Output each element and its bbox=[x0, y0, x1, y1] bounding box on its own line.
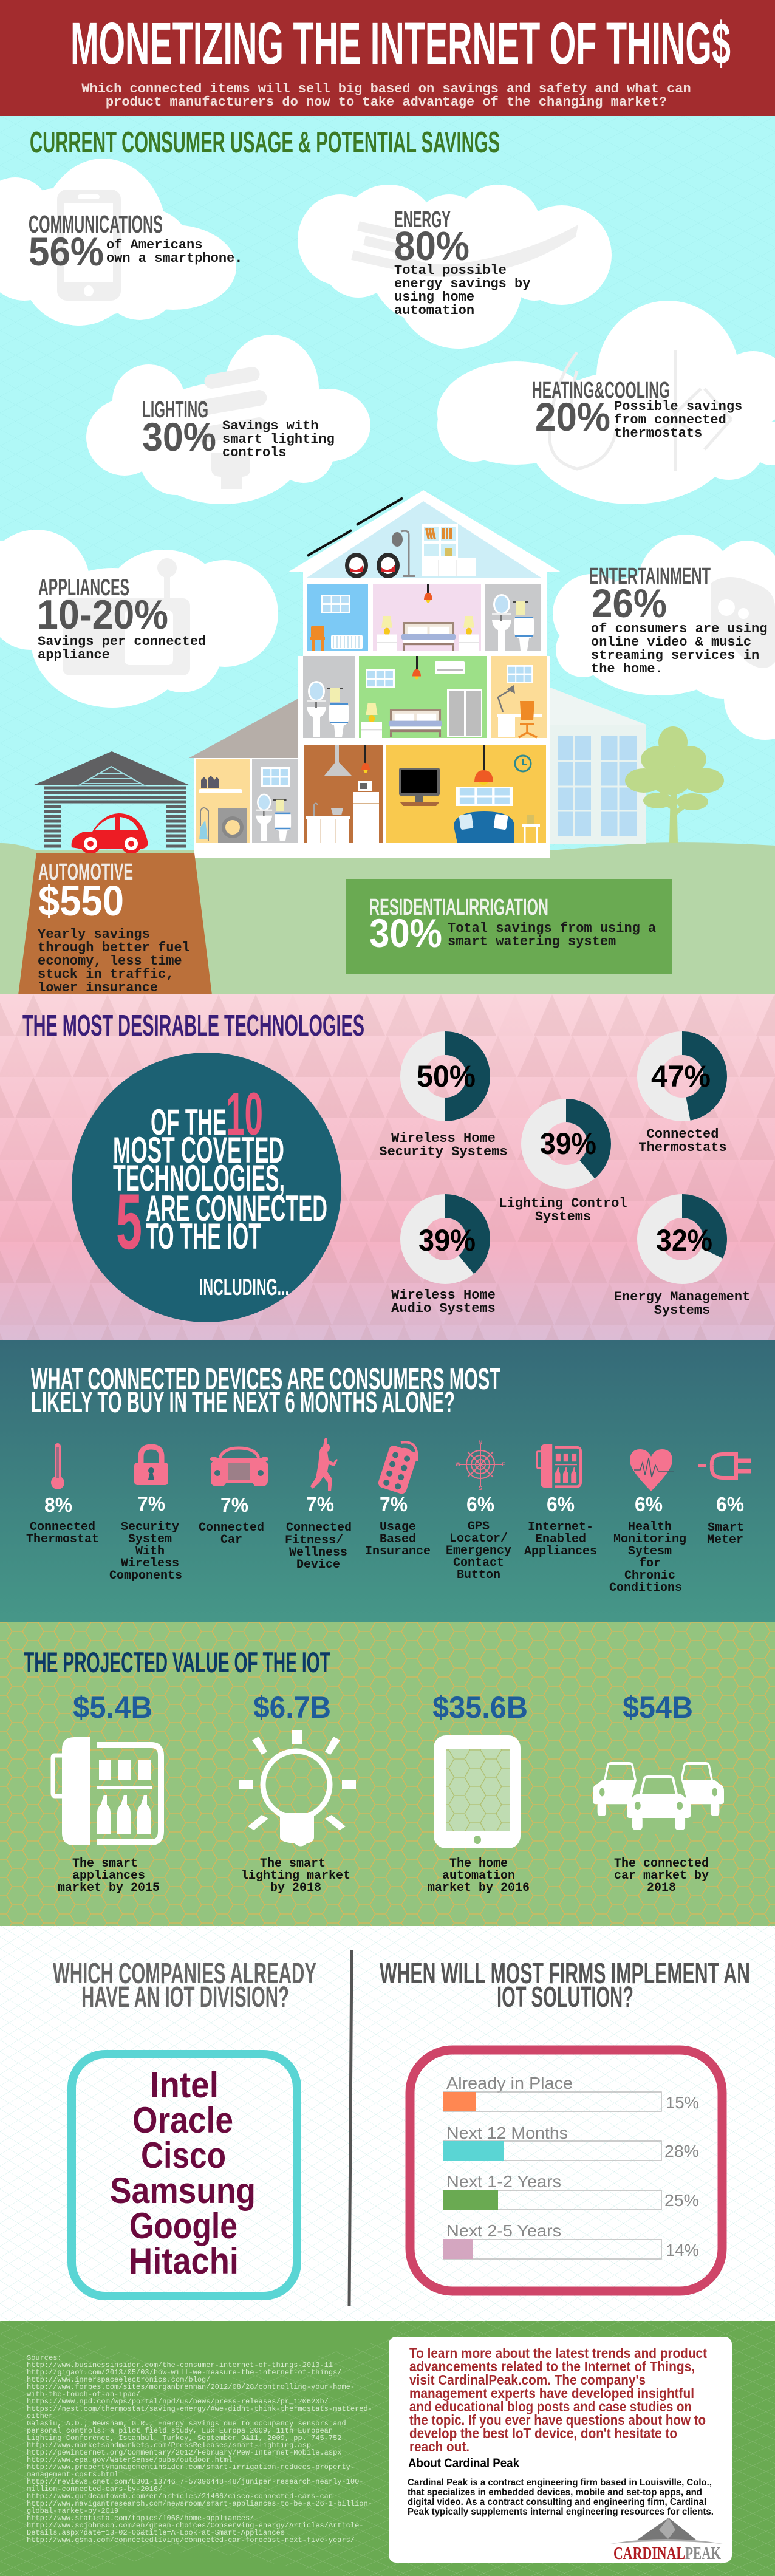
heading: connected devices: LIKELY TO BUY IN THE NEXT 6 MONTHS ALONE? bbox=[31, 1386, 455, 1419]
heading: when will most firms: IOT SOLUTION? bbox=[497, 1981, 633, 2014]
item: internet-enabled appliances: Internet- bbox=[528, 1520, 593, 1534]
call to action text bbox=[409, 2345, 707, 2455]
text block: sources: http://pewinternet.org/Commentary/2012/February/Pew-Internet-Mobile.aspx bbox=[27, 2448, 341, 2457]
description: automotive savings: economy, less time bbox=[38, 954, 182, 969]
description: appliance savings bbox=[38, 634, 206, 663]
text block: sources: with-the-touch-of-an-ipad/ bbox=[27, 2390, 140, 2399]
call to action text: management experts have developed insightful bbox=[409, 2385, 694, 2401]
cloud: communications bbox=[0, 159, 242, 326]
column: smart appliances $5.4B bbox=[53, 1690, 161, 1895]
item: usage based insurance: Based bbox=[380, 1532, 416, 1546]
call to action text: and educational blog posts and case studies on bbox=[409, 2399, 692, 2414]
item: connected thermostat: 8% bbox=[44, 1494, 72, 1516]
donut: wireless home security 50% bbox=[379, 1044, 508, 1160]
donut: energy management 32%: Energy Management bbox=[614, 1290, 750, 1305]
item: GPS locator: Locator/ bbox=[449, 1532, 508, 1546]
item: GPS locator: 6% bbox=[466, 1493, 494, 1515]
hex background bbox=[0, 1622, 775, 1926]
item: security system: System bbox=[128, 1532, 172, 1546]
item: GPS locator: N bbox=[479, 1440, 482, 1446]
text block: sources bbox=[27, 2354, 372, 2544]
description: thermostat savings: Possible savings bbox=[614, 399, 742, 414]
donut: lighting control 39% bbox=[499, 1110, 627, 1225]
about text: Peak typically supplements internal engineering resources for clients. bbox=[408, 2507, 714, 2517]
left wing bbox=[189, 699, 299, 846]
description: streaming: online video & music bbox=[591, 635, 751, 650]
right wing bbox=[550, 688, 646, 844]
pink background bbox=[0, 994, 775, 1340]
description: thermostat savings bbox=[614, 399, 742, 441]
column: smart lighting $6.7B: $6.7B bbox=[253, 1690, 331, 1724]
description: energy savings bbox=[394, 263, 530, 318]
column: home automation $35.6B: market by 2016 bbox=[428, 1881, 530, 1895]
panel: footer bbox=[0, 2321, 775, 2576]
callout: 5 of the 10: INCLUDING... bbox=[199, 1274, 289, 1300]
item: connected car bbox=[199, 1448, 268, 1547]
item: security system: 7% bbox=[137, 1492, 165, 1515]
description: lighting savings: Savings with bbox=[222, 419, 318, 434]
item: connected car: 7% bbox=[220, 1494, 248, 1516]
item: security system: With bbox=[135, 1545, 165, 1559]
donut: connected thermostats 47%: Connected bbox=[647, 1127, 719, 1142]
callout: 5 of the 10: 10 bbox=[226, 1080, 263, 1147]
call to action text: advancements related to the Internet of Things, bbox=[409, 2359, 695, 2374]
icon: smartphone bbox=[57, 190, 121, 301]
bar: next 2-5 years 14%: Next 2-5 Years bbox=[446, 2221, 561, 2240]
text block: sources: http://www.innerspaceelectronics.com/blog/ bbox=[27, 2376, 210, 2384]
column: connected car $54B: 2018 bbox=[647, 1881, 676, 1895]
box: company list: Google bbox=[129, 2205, 237, 2246]
item: health monitoring: Chronic bbox=[624, 1569, 675, 1583]
text block: sources: Lighting Conference, Istanbul, Turkey, September 9&11, 2009, pp. 745-752 bbox=[27, 2434, 341, 2442]
column: connected car $54B: $54B bbox=[623, 1690, 693, 1724]
solar panels bbox=[307, 498, 403, 556]
text block: sources: https://nest.com/thermostat/saving-energy/#we-didnt-think-thermostats-mattered- bbox=[27, 2405, 372, 2413]
bar: next 1-2 years 25%: 25% bbox=[664, 2191, 699, 2210]
donut: wireless home security 50%: Security Systems bbox=[379, 1144, 508, 1160]
column: smart appliances $5.4B: $5.4B bbox=[73, 1690, 152, 1724]
donut: connected thermostats 47% bbox=[638, 1044, 727, 1155]
bar: already in place 15%: Already in Place bbox=[446, 2074, 573, 2093]
text block: sources: http://www.epa.gov/WaterSense/pubs/outdoor.html bbox=[27, 2456, 232, 2464]
donut: lighting control 39%: Systems bbox=[535, 1209, 591, 1225]
label: communications: COMMUNICATIONS bbox=[29, 210, 163, 238]
description: automotive savings: lower insurance bbox=[38, 980, 158, 996]
item: internet-enabled appliances: 6% bbox=[547, 1493, 575, 1515]
box: company list bbox=[72, 2054, 297, 2296]
item: connected thermostat: Connected bbox=[30, 1520, 95, 1534]
illustration: garage with red car bbox=[33, 751, 190, 854]
description: lighting savings bbox=[222, 419, 335, 460]
description: energy savings: using home bbox=[394, 290, 474, 305]
donut: energy management 32%: Systems bbox=[654, 1303, 710, 1318]
description: automotive savings: through better fuel bbox=[38, 940, 190, 955]
description: irrigation savings: Total savings from using a bbox=[448, 921, 656, 936]
text block: sources: global-market-by-2019 bbox=[27, 2507, 118, 2515]
icon: flame and snowflake bbox=[550, 350, 731, 471]
description: thermostat savings: thermostats bbox=[614, 426, 702, 441]
call to action text: develop the best IoT device, don't hesitate to bbox=[409, 2425, 677, 2441]
label: residential irrigation: RESIDENTIALIRRIGATION bbox=[369, 895, 548, 920]
about heading: About Cardinal Peak bbox=[408, 2456, 519, 2470]
item: GPS locator: Contact bbox=[453, 1556, 504, 1570]
item: smart meter: 6% bbox=[716, 1493, 744, 1515]
cloud: entertainment bbox=[553, 535, 775, 740]
item: security system: Components bbox=[109, 1569, 182, 1583]
item: health monitoring: 6% bbox=[635, 1493, 663, 1515]
item: fitness device: Connected bbox=[286, 1521, 352, 1535]
item: fitness device: Device bbox=[296, 1558, 340, 1572]
bar: next 12 months 28%: 28% bbox=[664, 2142, 699, 2161]
top floor rooms bbox=[307, 584, 541, 651]
panel: current consumer usage and potential savings bbox=[0, 116, 775, 996]
description: appliance savings: appliance bbox=[38, 647, 110, 663]
column: connected car $54B: The connected bbox=[614, 1857, 709, 1871]
item: smart meter: Smart bbox=[708, 1521, 744, 1535]
column: smart appliances $5.4B: market by 2015 bbox=[58, 1881, 160, 1895]
text block: sources: either bbox=[27, 2412, 53, 2421]
logo: Cardinal Peak: PEAK bbox=[685, 2544, 721, 2563]
panel: header banner bbox=[0, 0, 775, 116]
item: internet-enabled appliances bbox=[524, 1444, 597, 1559]
text block: sources: http://www.navigantresearch.com/newsroom/smart-appliances-to-be-a-26-1-billion- bbox=[27, 2499, 372, 2508]
bar: next 12 months 28%: Next 12 Months bbox=[446, 2123, 568, 2142]
label: energy: ENERGY bbox=[394, 207, 451, 233]
description: energy savings: Total possible bbox=[394, 263, 507, 278]
donut: wireless audio 39%: Audio Systems bbox=[391, 1301, 496, 1316]
item: health monitoring: for bbox=[639, 1557, 661, 1571]
cloud: energy bbox=[298, 185, 612, 349]
subtitle bbox=[81, 81, 691, 110]
description: irrigation savings bbox=[448, 921, 656, 949]
item: connected car: Connected bbox=[199, 1521, 264, 1535]
stat: $550: $550 bbox=[38, 877, 124, 924]
about text: that specializes in embedded devices, mobile and set-top apps, and bbox=[408, 2487, 702, 2498]
label: appliances: APPLIANCES bbox=[38, 575, 129, 601]
icon: tablet bbox=[434, 1735, 521, 1848]
text block: sources: Details.aspx?date=13-02-06&title=A-Look-at-Smart-Appliances bbox=[27, 2529, 285, 2537]
donut: wireless audio 39%: 39% bbox=[418, 1223, 476, 1257]
bar: next 2-5 years 14%: 14% bbox=[666, 2241, 699, 2260]
callout: 5 of the 10: OF THE bbox=[151, 1102, 227, 1143]
label: lighting: LIGHTING bbox=[142, 397, 208, 423]
item: health monitoring: Health bbox=[628, 1520, 672, 1534]
column: home automation $35.6B: The home bbox=[449, 1857, 508, 1871]
donut: energy management 32% bbox=[614, 1206, 750, 1318]
middle floor rooms bbox=[303, 656, 547, 738]
item: usage based insurance: 7% bbox=[380, 1493, 408, 1515]
callout: 5 of the 10: MOST COVETED bbox=[113, 1130, 284, 1170]
icon: game controller bbox=[711, 577, 775, 668]
call to action text: reach out. bbox=[409, 2439, 469, 2455]
callout: 5 of the 10: 5 bbox=[116, 1177, 142, 1266]
text block: sources: http://www.forbes.com/sites/morganbrennan/2012/08/28/controlling-your-home- bbox=[27, 2383, 355, 2391]
box: company list: Cisco bbox=[141, 2135, 226, 2176]
item: connected car: Car bbox=[220, 1533, 242, 1547]
box: company list: Intel bbox=[150, 2065, 219, 2105]
donut: wireless home security 50%: Wireless Home bbox=[391, 1131, 496, 1146]
bar: already in place 15%: 15% bbox=[666, 2093, 699, 2112]
call to action text: To learn more about the latest trends and product bbox=[409, 2345, 707, 2361]
cloud: lighting bbox=[86, 335, 370, 504]
item: GPS locator: S bbox=[479, 1485, 482, 1491]
text block: sources: http://www.statista.com/topics/1068/home-appliances/ bbox=[27, 2514, 254, 2523]
text block: sources: http://www.marketsandmarkets.com/PressReleases/smart-lighting.asp bbox=[27, 2441, 311, 2450]
bar: next 1-2 years 25%: Next 1-2 Years bbox=[446, 2172, 561, 2191]
label: heating and cooling: HEATING&COOLING bbox=[532, 378, 670, 403]
item: smart meter bbox=[698, 1454, 751, 1547]
logo: Cardinal Peak: CARDINAL bbox=[613, 2544, 685, 2563]
box: company list: Samsung bbox=[110, 2170, 256, 2211]
callout: 5 of the 10: TECHNOLOGIES, bbox=[113, 1158, 285, 1198]
item: GPS locator: Button bbox=[457, 1568, 500, 1582]
icon: appliance controller bbox=[63, 558, 190, 675]
bar: already in place 15% bbox=[443, 2074, 699, 2112]
icon: CFL bulb bbox=[195, 366, 268, 489]
box: company list: Oracle bbox=[132, 2100, 233, 2140]
description: smartphone bbox=[106, 237, 242, 266]
column: smart lighting $6.7B: The smart bbox=[260, 1857, 326, 1871]
description: smartphone: of Americans bbox=[106, 237, 202, 253]
donut: wireless home security 50%: 50% bbox=[417, 1059, 476, 1093]
donut: lighting control 39%: Lighting Control bbox=[499, 1196, 627, 1211]
description: streaming bbox=[591, 621, 767, 677]
item: fitness device: Wellness bbox=[289, 1546, 347, 1560]
label: automotive: AUTOMOTIVE bbox=[38, 859, 133, 885]
footer background bbox=[0, 2321, 775, 2576]
item: fitness device bbox=[285, 1438, 352, 1572]
description: automotive savings: stuck in traffic, bbox=[38, 967, 174, 982]
heading: connected devices bbox=[31, 1363, 500, 1419]
call to action text: visit CardinalPeak.com. The company's bbox=[409, 2372, 646, 2388]
box: implementation bar chart bbox=[410, 2050, 722, 2291]
attic furniture bbox=[345, 524, 476, 578]
item: GPS locator: E bbox=[502, 1461, 505, 1467]
stat: 30% irrigation: 30% bbox=[369, 910, 442, 955]
column: connected car $54B: car market by bbox=[614, 1869, 709, 1883]
stat: 56%: 56% bbox=[29, 229, 104, 274]
white patterned background bbox=[0, 1926, 775, 2321]
item: internet-enabled appliances: Enabled bbox=[535, 1532, 586, 1546]
donut: wireless audio 39%: Wireless Home bbox=[391, 1288, 496, 1303]
heading: which companies: HAVE AN IOT DIVISION? bbox=[81, 1981, 289, 2014]
description: streaming: the home. bbox=[591, 661, 663, 677]
item: health monitoring bbox=[609, 1449, 686, 1595]
description: energy savings: automation bbox=[394, 303, 474, 318]
call to action text: the topic. If you ever have questions about how to bbox=[409, 2412, 706, 2428]
icon: energy plug bbox=[352, 225, 578, 277]
text block: sources: Galasiu, A.D.; Newsham, G.R., Energy savings due to occupancy sensors and bbox=[27, 2419, 346, 2428]
item: GPS locator: W bbox=[456, 1461, 461, 1467]
item: GPS locator: GPS bbox=[468, 1520, 490, 1534]
item: health monitoring: Sytesm bbox=[628, 1545, 672, 1559]
subtitle: product manufacturers do now to take advantage of the changing market? bbox=[106, 95, 667, 110]
item: health monitoring: Conditions bbox=[609, 1581, 682, 1595]
column: home automation $35.6B: automation bbox=[442, 1869, 515, 1883]
column: smart lighting $6.7B: by 2018 bbox=[270, 1881, 321, 1895]
bar: next 1-2 years 25% bbox=[443, 2172, 699, 2210]
bar: next 2-5 years 14% bbox=[443, 2221, 699, 2260]
icon: three cars bbox=[593, 1763, 724, 1834]
item: smart meter: Meter bbox=[707, 1533, 743, 1547]
description: automotive savings: Yearly savings bbox=[38, 927, 150, 942]
panel: the most desirable technologies bbox=[0, 994, 775, 1340]
illustration: house cross-section bbox=[189, 490, 646, 858]
about text: Cardinal Peak is a contract engineering firm based in Louisville, Colo., bbox=[408, 2478, 712, 2488]
column: smart appliances $5.4B: The smart bbox=[72, 1857, 138, 1871]
about text bbox=[408, 2478, 714, 2517]
stat: 30% lighting: 30% bbox=[142, 414, 216, 459]
text block: sources: million-connected-cars-by-2016/ bbox=[27, 2485, 162, 2493]
icon: fridge bbox=[53, 1737, 161, 1845]
description: appliance savings: Savings per connected bbox=[38, 634, 206, 649]
column: home automation $35.6B bbox=[428, 1690, 530, 1895]
text block: sources: management-costs.html bbox=[27, 2470, 118, 2479]
description: lighting savings: controls bbox=[222, 445, 287, 460]
description: automotive savings bbox=[38, 927, 190, 996]
box: company list: Hitachi bbox=[129, 2241, 239, 2281]
heading: projected value: THE PROJECTED VALUE OF THE IOT bbox=[24, 1646, 330, 1678]
heading: when will most firms bbox=[380, 1958, 750, 2014]
description: smartphone: own a smartphone. bbox=[106, 251, 242, 266]
heading: which companies bbox=[53, 1958, 316, 2014]
card: about Cardinal Peak bbox=[389, 2337, 732, 2563]
description: streaming: of consumers are using bbox=[591, 621, 767, 637]
text block: sources: Sources: bbox=[27, 2354, 62, 2362]
column: connected car $54B bbox=[593, 1690, 724, 1895]
text block: sources: https://www.npd.com/wps/portal/npd/us/news/press-releases/pr_120620b/ bbox=[27, 2397, 329, 2406]
item: security system: Security bbox=[121, 1520, 179, 1534]
cloud: appliances bbox=[0, 530, 278, 708]
column: smart appliances $5.4B: appliances bbox=[72, 1869, 145, 1883]
text block: sources: http://gigaom.com/2013/05/03/how-will-we-measure-the-internet-of-things/ bbox=[27, 2368, 341, 2377]
donut: connected thermostats 47%: 47% bbox=[651, 1059, 711, 1093]
text block: sources: http://www.scjohnson.com/en/green-choices/Conserving-energy/Articles/Article- bbox=[27, 2521, 363, 2530]
item: connected thermostat bbox=[26, 1443, 99, 1546]
ground bbox=[0, 842, 775, 995]
column: smart lighting $6.7B: lighting market bbox=[241, 1869, 350, 1883]
item: usage based insurance bbox=[365, 1442, 431, 1559]
stat: 10-20%: 10-20% bbox=[37, 592, 168, 638]
item: health monitoring: Monitoring bbox=[613, 1532, 686, 1546]
item: security system: Wireless bbox=[121, 1557, 179, 1571]
text block: sources: http://www.businessinsider.com/the-consumer-internet-of-things-2013-11 bbox=[27, 2361, 333, 2369]
text block: sources: personal controls: a pilot field study, Lux Europa 2009, 11th European bbox=[27, 2427, 333, 2435]
icon: red car bbox=[72, 813, 148, 854]
item: fitness device: Fitness/ bbox=[285, 1534, 343, 1548]
callout: 5 of the 10 bbox=[72, 1053, 341, 1322]
panel: IoT divisions and implementation bbox=[0, 1926, 775, 2321]
donut: connected thermostats 47%: Thermostats bbox=[638, 1140, 727, 1155]
panel: the projected value of the IoT bbox=[0, 1622, 775, 1926]
icon: tree bbox=[625, 726, 724, 843]
callout: 5 of the 10: ARE CONNECTED bbox=[146, 1188, 327, 1229]
description: thermostat savings: from connected bbox=[614, 412, 726, 428]
stat: 80%: 80% bbox=[394, 224, 469, 269]
about text: digital video. As a contract consulting and engineering firm, Cardinal bbox=[408, 2497, 706, 2507]
donut: energy management 32%: 32% bbox=[656, 1223, 712, 1257]
description: irrigation savings: smart watering system bbox=[448, 934, 616, 949]
main house body bbox=[194, 490, 561, 858]
donut: lighting control 39%: 39% bbox=[540, 1127, 596, 1161]
text block: sources: http://www.guideautoweb.com/en/articles/21466/cisco-connected-cars-can bbox=[27, 2492, 333, 2501]
column: smart lighting $6.7B bbox=[239, 1690, 356, 1895]
donut: wireless audio 39% bbox=[391, 1206, 496, 1316]
text block: sources: http://www.gsma.com/connectedliving/connected-car-forecast-next-five-years/ bbox=[27, 2536, 355, 2544]
stat: 26%: 26% bbox=[592, 581, 667, 626]
description: energy savings: energy savings by bbox=[394, 276, 530, 292]
text block: sources: http://reviews.cnet.com/8301-13746_7-57396448-48/juniper-research-nearly-100- bbox=[27, 2478, 363, 2486]
panel: automotive bbox=[18, 853, 212, 996]
description: lighting savings: smart lighting bbox=[222, 432, 335, 447]
text block: sources: http://www.propertymanagementinsider.com/smart-irrigation-reduces-property- bbox=[27, 2463, 355, 2472]
item: usage based insurance: Insurance bbox=[365, 1545, 431, 1559]
item: security system bbox=[109, 1447, 182, 1583]
item: usage based insurance: Usage bbox=[380, 1520, 416, 1534]
heading: which companies: WHICH COMPANIES ALREADY bbox=[53, 1958, 316, 1990]
heading: most desirable: THE MOST DESIRABLE TECHNOLOGIES bbox=[22, 1010, 364, 1042]
logo: Cardinal Peak bbox=[610, 2518, 723, 2563]
stat: 20%: 20% bbox=[535, 394, 610, 439]
item: GPS locator: Emergency bbox=[446, 1544, 511, 1558]
panel: residential irrigation bbox=[346, 879, 672, 974]
item: connected thermostat: Thermostat bbox=[26, 1532, 99, 1546]
panel: connected devices next 6 months bbox=[0, 1340, 775, 1622]
callout: 5 of the 10: TO THE IOT bbox=[146, 1216, 261, 1257]
icon: light bulb bbox=[239, 1730, 356, 1847]
sky background bbox=[0, 116, 775, 875]
item: fitness device: 7% bbox=[306, 1493, 334, 1515]
description: streaming: streaming services in bbox=[591, 648, 759, 663]
column: home automation $35.6B: $35.6B bbox=[432, 1690, 528, 1724]
subtitle: Which connected items will sell big based on savings and safety and what can bbox=[81, 81, 691, 97]
ground floor rooms bbox=[304, 745, 546, 843]
bar: next 12 months 28% bbox=[443, 2123, 699, 2161]
item: GPS locator bbox=[446, 1440, 511, 1582]
item: internet-enabled appliances: Appliances bbox=[524, 1545, 597, 1559]
cloud: heating and cooling bbox=[437, 301, 775, 504]
